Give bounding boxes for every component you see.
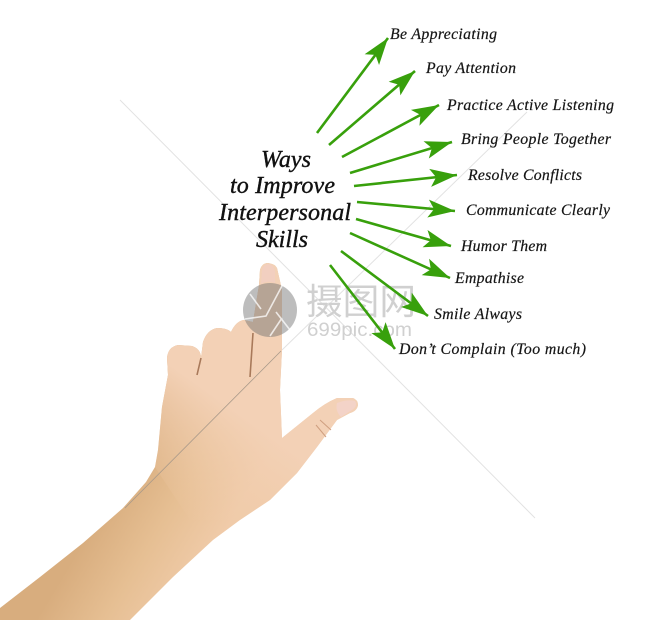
hand lighter overlay [155,263,358,520]
title: Interpersonal [218,200,351,226]
hand and arm silhouette [0,263,358,620]
arrow: Communicate Clearly [357,202,455,211]
hand pointing upward [0,263,358,620]
watermark text: 699pic.com: 699pic.com [307,320,412,341]
line across hand [125,351,281,508]
thumbnail [336,400,356,417]
arrow: Empathise [350,233,450,278]
arrow: Bring People Together [350,142,452,173]
label: Humor Them: Humor Them [460,238,547,255]
arrow: Practice Active Listening [342,105,439,157]
thumb knuckle lines [316,420,331,437]
label: Be Appreciating: Be Appreciating [390,26,497,43]
label: Practice Active Listening: Practice Active Listening [446,97,614,114]
green radiating arrows [317,38,457,349]
arrow: Pay Attention [329,71,415,145]
arrow: Smile Always [341,251,428,316]
label: Pay Attention: Pay Attention [425,60,516,77]
title: Skills [256,227,308,253]
label: Don't Complain: Don’t Complain (Too much) [398,341,586,358]
arrow: Humor Them [356,219,451,246]
index fingernail [261,264,275,284]
arrow: Be Appreciating [317,38,388,133]
arrow: Don't Complain [330,265,395,349]
watermark text: 摄图网: 摄图网 [306,281,416,322]
label: Communicate Clearly: Communicate Clearly [466,202,611,219]
watermark logo [243,283,297,337]
label: Empathise: Empathise [454,270,524,287]
label: Resolve Conflicts: Resolve Conflicts [467,167,582,184]
title [218,147,351,253]
label: Bring People Together: Bring People Together [461,131,612,148]
diagonal line: top-right to hand [282,112,527,350]
arrow: Resolve Conflicts [354,175,457,186]
label: Smile Always: Smile Always [434,306,522,323]
title: Ways [261,147,311,173]
diagonal line: top-left to bottom-right [120,100,535,518]
finger creases [197,333,253,377]
title: to Improve [230,173,335,199]
watermark [243,281,416,341]
arrow labels [390,26,614,358]
